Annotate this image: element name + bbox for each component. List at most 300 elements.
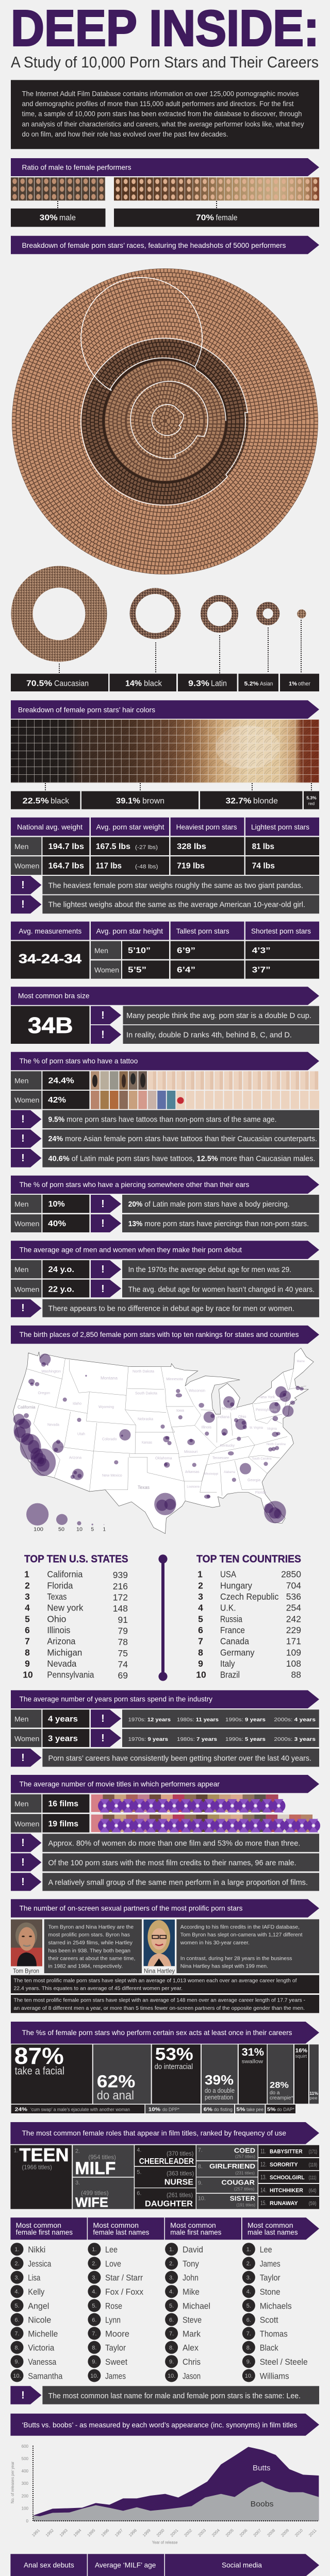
chart: film title roles treemap: (370 titles) [167, 2150, 194, 2157]
panel: top ten countries: 8 [198, 1647, 203, 1657]
list: female last names: Sweet [105, 2357, 127, 2367]
chart: sex acts treemap: 24% [15, 2106, 28, 2112]
chart: sex acts treemap: ‘cum swap’ a male’s ejaculate with another woman [30, 2107, 130, 2112]
chart: sex acts treemap: do anal [97, 2089, 134, 2103]
heading: most common names: male last names [248, 2228, 298, 2236]
chart: butts vs boobs area chart: Boobs [251, 2500, 274, 2509]
chart: film title roles treemap: (954 titles) [88, 2154, 116, 2161]
panel: debut men row: ! [101, 1264, 105, 1275]
label: 30% male: male [59, 214, 76, 223]
chart: butts vs boobs area chart: 400 [22, 2469, 29, 2473]
heading: female roles: The most common female roles that appear in film titles, ranked by frequency of use [22, 2129, 286, 2137]
list: male last names: 9. [246, 2359, 251, 2365]
map state labels: Missouri [184, 1450, 197, 1454]
panel: measurements and height table: Shortest porn stars [251, 927, 311, 935]
callout: double D belief: Many people think the avg. porn star is a double D cup. [126, 1012, 311, 1020]
list: female last names: 6. [92, 2317, 96, 2323]
panel: career length men row: 1970s: 12 years [128, 1717, 171, 1723]
map state labels: Illinois [202, 1426, 211, 1430]
callout: double D rank: In reality, double D ranks 4th, behind B, C, and D. [126, 1031, 292, 1039]
map state labels: Florida [255, 1491, 266, 1495]
callout: tattoo 9.5% [11, 1110, 319, 1128]
text block: Byron and Hartley: has been in 938. They both began [48, 1947, 130, 1954]
stat: 34B [11, 1006, 90, 1044]
map state labels: Wyoming [98, 1405, 114, 1409]
text block: Byron and Hartley: most prolific porn stars. Byron has [48, 1932, 130, 1938]
chart: sex acts treemap: do DPP* [162, 2107, 179, 2112]
panel: top ten countries: 704 [286, 1580, 301, 1590]
chart: film title roles treemap: BABYSITTER [270, 2148, 303, 2155]
panel: top ten countries: 109 [286, 1647, 301, 1657]
panel: piercing women row: 40% [48, 1219, 66, 1228]
panel: top ten U.S. states: California [47, 1569, 83, 1580]
chart: film title roles treemap: 6. [137, 2191, 141, 2197]
chart: film title roles treemap [10, 2144, 319, 2210]
list: male last names: James [260, 2259, 280, 2268]
chart: film title roles treemap: 12. [260, 2161, 267, 2168]
panel: top ten U.S. states: Pennsylvania [47, 1670, 94, 1680]
chart: sex acts treemap: do fisting [214, 2107, 233, 2112]
map legend labels [34, 1527, 106, 1533]
map state labels [18, 1360, 305, 1495]
panel: career length women row: 1980s: 7 years [177, 1736, 217, 1742]
callout: double D rank: ! [101, 1029, 105, 1041]
panel: weight table: 167.5 lbs [96, 842, 130, 851]
callout: 96 are male: ! [21, 1857, 25, 1868]
chart: film title roles treemap: (231 titles) [235, 2171, 255, 2176]
panel: top ten U.S. states: Ohio [47, 1614, 66, 1624]
map state labels: Iowa [176, 1409, 184, 1413]
panel: measurements and height table: 5’5” [128, 966, 146, 975]
panel: career length women row [11, 1729, 319, 1747]
map state labels: Indiana [218, 1416, 229, 1419]
list: female last names: Moore [105, 2329, 129, 2338]
panel: top ten U.S. states: 79 [118, 1626, 128, 1636]
labels: race percentages: 1% [289, 681, 297, 687]
panel: measurements and height table: 3’7” [252, 966, 271, 975]
list: female last names: Love [105, 2259, 121, 2268]
panel: top ten U.S. states: 5 [25, 1614, 30, 1624]
chart: butts vs boobs area chart [10, 2444, 319, 2545]
chart: film title roles treemap: (1966 titles) [22, 2164, 52, 2171]
panel: weight table: Men [14, 842, 29, 851]
panel: top ten countries: Germany [220, 1647, 255, 1657]
chart: butts vs boobs area chart: 2002 [183, 2528, 193, 2538]
chart: butts vs boobs area chart: 2007 [253, 2528, 262, 2538]
map state labels: Arkansas [185, 1470, 200, 1474]
heading: most common names: Most common [16, 2221, 61, 2229]
panel: measurements and height table: 6’9” [177, 946, 195, 955]
map state labels: South Carolina [252, 1458, 272, 1461]
heading: butts vs boobs [10, 2414, 319, 2436]
panel: introduction: do on film, and how their role has evolved over the past few decades. [22, 130, 228, 138]
text block: partner counts: women in his 30-year career. [180, 1940, 250, 1946]
callout: same men: A relatively small group of the same men perform in a large proportion of films. [48, 1878, 308, 1887]
list: female last names: Lee [105, 2245, 118, 2255]
list: female last names: 7. [92, 2331, 96, 2337]
connectors: race rings to labels [59, 620, 301, 673]
panel: introduction: an analysis of their characteristics and careers, what the average performer looks like, what they [22, 120, 304, 128]
list: male last names: Steel / Steele [260, 2357, 308, 2367]
list: male last names: 2. [246, 2261, 251, 2267]
chart: butts vs boobs area chart: 2006 [239, 2528, 249, 2538]
list: female last names: Taylor [105, 2343, 126, 2353]
heading: most common names: Most common [93, 2221, 139, 2229]
labels: race percentages: other [298, 681, 310, 687]
callout: careers shorter [11, 1749, 319, 1767]
list: male first names: Steve [183, 2315, 202, 2325]
list: male first names: 7. [169, 2331, 174, 2337]
chart: sex acts treemap: 5% [236, 2106, 245, 2112]
panel: measurements and height table: 5’10” [128, 946, 151, 955]
chart: sex acts treemap: 11% [309, 2091, 318, 2096]
callout: tattoo 9.5%: 9.5% more porn stars have tattoos than non-porn stars of the same age. [48, 1115, 276, 1124]
panel: top ten countries: 254 [286, 1603, 301, 1613]
map state labels: Georgia [248, 1479, 260, 1482]
list: female first names: 9. [14, 2359, 20, 2365]
callout: double D belief: ! [101, 1010, 105, 1021]
text block: male average: The ten most prolific male porn stars have slept with an average of 1,013 women each over an average career length of [13, 1977, 297, 1984]
chart: film title roles treemap: 1. [13, 2148, 19, 2154]
text block: male average: 22.4 years. This equates to an average of 45 different women per year. [13, 1986, 183, 1992]
text block: male average [11, 1975, 319, 1993]
panel: weight table: 81 lbs [252, 842, 274, 851]
list: female first names: Kelly [28, 2287, 45, 2297]
chart: film title roles treemap: TEEN [20, 2144, 69, 2165]
panel: tattoo men row: 24.4% [48, 1077, 74, 1086]
callout: careers shorter: ! [21, 1752, 25, 1764]
chart: sex acts treemap: take pee [246, 2107, 263, 2112]
chart: film title roles treemap: (64) [309, 2188, 317, 2194]
panel: weight table: 194.7 lbs [48, 842, 84, 851]
chart: film title roles treemap: WIFE [75, 2194, 108, 2210]
panel: career length men row: ! [101, 1713, 105, 1724]
callout: tattoo 24%: ! [21, 1133, 25, 1144]
heading: female roles [10, 2122, 319, 2144]
panel: films men row [11, 1794, 286, 1812]
labels: hair percentages: 39.1% [116, 796, 140, 805]
chart: butts vs boobs area chart: No. of releases per year [10, 2462, 15, 2503]
chart: hair color swatch grid [11, 720, 319, 783]
text block: partner counts: In contrast, during her 28 years in the business [180, 1955, 292, 1961]
map state labels: Tennessee [212, 1456, 229, 1460]
map state labels: Nevada [47, 1423, 59, 1427]
heading: most common names: male first names [170, 2228, 221, 2236]
panel: tattoo men row [11, 1071, 319, 1090]
labels: race percentages: 5.2% [244, 681, 259, 687]
panel: piercing men row: ! [101, 1198, 105, 1210]
panel: career length men row [11, 1709, 319, 1727]
chart: film title roles treemap: 13. [260, 2174, 267, 2181]
chart: sex acts treemap: 62% [97, 2072, 135, 2092]
labels: hair percentages: blonde [253, 796, 278, 805]
panel: top ten countries: 6 [198, 1625, 203, 1635]
label: 70% female [114, 209, 319, 227]
heading: bra size: Most common bra size [18, 992, 90, 1000]
panel: measurements and height table: Avg. measurements [19, 927, 81, 935]
list: male last names: 5. [246, 2303, 251, 2309]
label: 70% female: female [216, 214, 237, 223]
list: female first names: Lisa [28, 2273, 41, 2283]
panel: career length men row: 2000s: 4 years [274, 1717, 316, 1723]
panel: top ten U.S. states: Florida [47, 1580, 73, 1590]
list: female first names: Nicole [28, 2315, 51, 2325]
chart: butts vs boobs area chart: 1997 [114, 2528, 124, 2538]
chart: butts vs boobs area chart: 500 [22, 2456, 29, 2461]
list: female first names: 8. [14, 2345, 20, 2351]
panel: top ten countries: 242 [286, 1614, 301, 1624]
panel: top ten U.S. states: Michigan [47, 1647, 82, 1657]
callout: 80% of women: Approx. 80% of women do more than one film and 53% do more than three. [48, 1839, 300, 1848]
panel: career length women row: 3 years [48, 1734, 78, 1743]
chart: film title roles treemap: (499 titles) [81, 2190, 109, 2197]
callout: tattoo 24% [11, 1129, 319, 1148]
callout: double D rank [91, 1025, 319, 1044]
panel: top ten U.S. states: Illinois [47, 1625, 71, 1635]
connector: male [57, 201, 58, 208]
heading: debut age: The average age of men and women when they make their porn debut [20, 1246, 242, 1254]
list: female first names: 4. [14, 2289, 20, 2295]
heading: hair colors [11, 700, 319, 719]
heading: sex acts [11, 2022, 319, 2044]
chart: sex acts treemap: 39% [205, 2072, 234, 2088]
chart: film title roles treemap: 7. [198, 2147, 203, 2154]
heading: movie titles [11, 1775, 319, 1793]
list: male last names: Scott [260, 2315, 278, 2325]
panel: piercing women row: 13% more porn stars have piercings than non-porn stars. [128, 1219, 309, 1228]
panel: measurements and height table: Avg. porn star height [96, 927, 163, 935]
map state labels: Washington [41, 1370, 61, 1374]
heading: piercings: The % of porn stars who have a piercing somewhere other than their ears [20, 1180, 249, 1189]
connector: female [216, 201, 217, 208]
heading: breakdown of races [11, 236, 319, 254]
labels: hair percentages: 32.7% [226, 796, 252, 805]
callout: most common last name: The most common last name for male and female porn stars is the same: Lee. [48, 2392, 301, 2400]
panel: piercing men row: 20% of Latin male porn stars have a body piercing. [128, 1200, 290, 1209]
chart: film title roles treemap: (119) [309, 2162, 317, 2168]
panel: top ten countries: 88 [291, 1670, 301, 1680]
panel: top ten U.S. states: 4 [25, 1603, 30, 1613]
chart: sex acts treemap: squirt [295, 2054, 307, 2059]
heading: butts vs boobs: ‘Butts vs. boobs’ - as measured by each word’s appearance (inc. synonyms) in film titles [22, 2421, 297, 2429]
map state labels: New York [259, 1396, 275, 1399]
panel: top ten U.S. states [23, 1554, 128, 1681]
chart: sex acts treemap: 6% [204, 2106, 213, 2112]
panel: top ten U.S. states: Arizona [47, 1636, 76, 1647]
chart: Caucasian ring [22, 577, 96, 651]
panel: piercing men row [11, 1195, 319, 1213]
label: 30% male: 30% [40, 214, 58, 223]
panel: debut men row: 24 y.o. [48, 1265, 74, 1274]
heading: most common names: female last names [93, 2228, 149, 2236]
labels: race percentages: Latin [211, 680, 227, 688]
callout: debut age by race: There appears to be no difference in debut age by race for men or women. [48, 1304, 294, 1313]
list: male first names: 6. [169, 2317, 174, 2323]
panel: top ten U.S. states: 7 [25, 1636, 30, 1647]
list: male first names: 5. [169, 2303, 174, 2309]
map legend labels: 1 [103, 1527, 106, 1533]
chart: butts vs boobs area chart: 2003 [197, 2528, 207, 2538]
panel: career length women row: 2000s: 3 years [274, 1736, 316, 1742]
panel: tattoo women row [11, 1091, 319, 1109]
labels: hair percentages: 5.3% [306, 795, 317, 801]
chart: sex acts treemap: penetration [205, 2094, 233, 2101]
list: male first names: 9. [169, 2359, 174, 2365]
panel: career length men row: 1980s: 11 years [177, 1717, 219, 1723]
chart: film title roles treemap: 8. [198, 2163, 203, 2170]
panel: top ten countries: USA [220, 1569, 236, 1580]
panel: top ten U.S. states: 148 [113, 1603, 128, 1614]
map state labels: Arizona [69, 1456, 81, 1460]
chart: film title roles treemap: COUGAR [221, 2179, 255, 2187]
heading: hair colors: Breakdown of female porn stars’ hair colors [18, 706, 155, 714]
chart: film title roles treemap: (363 titles) [167, 2170, 194, 2177]
map legend labels: 100 [34, 1527, 43, 1533]
text block: partner counts: Tom Byron has slept on-camera with 1,127 different [180, 1932, 303, 1938]
chart: butts vs boobs area chart: Year of release [152, 2540, 178, 2545]
panel: debut men row: In the 1970s the average debut age for men was 29. [128, 1265, 291, 1274]
list: female last names: 10. [90, 2373, 98, 2379]
chart: film title roles treemap: 4. [137, 2147, 141, 2154]
list: male last names: 3. [246, 2275, 251, 2281]
chart: film title roles treemap: RUNAWAY [270, 2200, 298, 2207]
list: female last names: 4. [92, 2289, 96, 2295]
panel: top ten U.S. states: New york [47, 1603, 84, 1613]
map state labels: North Dakota [133, 1370, 154, 1374]
list: female first names: 5. [14, 2303, 20, 2309]
map state labels: Oregon [38, 1392, 50, 1395]
panel: piercing men row: 10% [48, 1200, 65, 1209]
chart: butts vs boobs area chart: 2005 [225, 2528, 235, 2538]
panel: top ten countries: France [220, 1625, 245, 1635]
labels: hair percentages [11, 791, 319, 809]
race boundary rings [81, 278, 248, 505]
list: female first names: 6. [14, 2317, 20, 2323]
text block: partner counts: Nina Hartley has slept with 199 men. [180, 1963, 268, 1970]
list: female last names: 9. [92, 2359, 96, 2365]
chart: film title roles treemap: (261 titles) [167, 2191, 193, 2198]
panel: career length men row: 1990s: 9 years [225, 1717, 266, 1723]
map state labels: Pennsylvania [256, 1409, 277, 1412]
heading: on-screen partners: The number of on-screen sexual partners of the most prolific porn stars [20, 1904, 242, 1912]
chart: butts vs boobs area chart: 1998 [128, 2528, 138, 2538]
chart: film title roles treemap: (257 titles) [234, 2187, 255, 2192]
panel: measurements and height table: Men [94, 946, 108, 955]
callout: careers shorter: Porn stars’ careers have consistently been getting shorter over the last 40 years. [48, 1754, 311, 1762]
chart: other dot [297, 609, 306, 618]
map state labels: Michigan [222, 1407, 237, 1411]
map state labels: Virginia [267, 1428, 277, 1431]
photo: Nina Hartley: Nina Hartley [144, 1968, 175, 1974]
heading: debut age [11, 1241, 319, 1259]
map legend bubbles [26, 1503, 104, 1526]
callout: lightest: The lightest weighs about the same as the average American 10-year-old girl. [48, 901, 305, 909]
list: male first names: 1. [169, 2247, 174, 2253]
chart: sex acts treemap: creampie* [270, 2095, 293, 2101]
panel: films women row: 19 films [48, 1820, 78, 1828]
heading: birth places: The birth places of 2,850 female porn stars with top ten rankings for states and countries [20, 1330, 299, 1338]
chart: film title roles treemap: GIRLFRIEND [209, 2162, 255, 2170]
chart: film title roles treemap: 10. [198, 2196, 206, 2202]
panel: top ten countries: 4 [198, 1603, 203, 1613]
panel: top ten U.S. states: 3 [25, 1591, 30, 1602]
list: male first names: 4. [169, 2289, 174, 2295]
chart: film title roles treemap: CHEERLEADER [139, 2157, 194, 2166]
panel: films men row: Men [14, 1800, 29, 1808]
list: female first names: 1. [14, 2247, 20, 2253]
list: male last names: 10. [245, 2373, 253, 2379]
list: female first names: Nikki [28, 2245, 45, 2255]
list: female first names: Samantha [28, 2371, 63, 2381]
chart: butts vs boobs area chart: 300 [22, 2481, 29, 2486]
list: male first names [165, 2243, 210, 2382]
callout: most common last name: ! [21, 2389, 25, 2401]
chart: film title roles treemap: COED [234, 2146, 255, 2154]
heading: most common names: Most common [170, 2221, 216, 2229]
callout: 96 are male [11, 1853, 319, 1871]
heading: movie titles: The average number of movie titles in which performers appear [20, 1780, 220, 1788]
chart: sex acts treemap: take a facial [15, 2065, 64, 2077]
panel: top ten U.S. states: Texas [47, 1591, 67, 1602]
chart: butts vs boobs area chart: 1992 [45, 2528, 55, 2538]
heading: years in the industry: The average number of years porn stars spend in the industry [20, 1695, 212, 1703]
heading: sex acts: The %s of female porn stars who perform certain sex acts at least once in their careers [22, 2028, 292, 2037]
panel: introduction: and demographic profiles of more than 115,000 adult performers and directors. For the first [22, 99, 294, 108]
heading: ratio of male to female performers [11, 158, 319, 176]
chart: film title roles treemap: NURSE [164, 2178, 193, 2187]
list: female last names: Lynn [105, 2315, 121, 2325]
callout: heaviest: The heaviest female porn star weighs roughly the same as two giant pandas. [48, 881, 303, 890]
list: female first names: Vanessa [28, 2357, 57, 2367]
map state labels: North Carolina [267, 1443, 286, 1446]
panel: tattoo men row: Men [14, 1077, 29, 1085]
list: female last names: Fox / Foxx [105, 2287, 143, 2297]
panel: top ten countries: 229 [286, 1625, 301, 1635]
panel: career length women row: ! [101, 1733, 105, 1744]
chart: butts vs boobs area chart: 2001 [170, 2528, 179, 2538]
panel: introduction: time, a sample of 10,000 porn stars has been extracted from the database to discover, through [22, 110, 302, 118]
list: female first names: 7. [14, 2331, 20, 2337]
panel: top ten countries: Brazil [220, 1670, 240, 1680]
callout: tattoo 9.5%: ! [21, 1114, 25, 1125]
list: female first names: 2. [14, 2261, 20, 2267]
list: male first names: Mike [183, 2287, 200, 2297]
callout: most common last name [10, 2386, 319, 2404]
labels: race percentages: 14% [125, 680, 142, 688]
map state labels: Montana [101, 1376, 118, 1381]
chart: sex acts treemap [11, 2043, 319, 2113]
callout: tattoo 40.6% [11, 1149, 319, 1167]
list: female first names [10, 2243, 63, 2382]
chart: US bubble map [13, 1348, 314, 1534]
list: male first names: Mark [183, 2329, 201, 2338]
chart: film title roles treemap: SISTER [230, 2195, 256, 2202]
panel: top ten U.S. states: 91 [118, 1615, 128, 1625]
panel: career length men row: 4 years [48, 1715, 78, 1723]
chart: butts vs boobs area chart: 600 [22, 2444, 29, 2449]
panel: weight table [11, 818, 319, 875]
heading: three-column header: Anal sex debuts [24, 2561, 74, 2569]
panel: weight table: 74 lbs [252, 862, 275, 871]
callout: tattoo 24%: 24% more Asian female porn stars have tattoos than their Caucasian counterparts. [48, 1134, 317, 1143]
panel: top ten U.S. states: 78 [118, 1637, 128, 1647]
panel: top ten U.S. states: 216 [113, 1581, 128, 1591]
chart: film title roles treemap: SORORITY [270, 2162, 298, 2168]
chart: circular mosaic of 5000 headshots [12, 268, 318, 574]
panel: top ten countries: 9 [198, 1658, 203, 1669]
callout: same men: ! [21, 1876, 25, 1888]
panel: top ten countries: 2850 [281, 1569, 301, 1580]
